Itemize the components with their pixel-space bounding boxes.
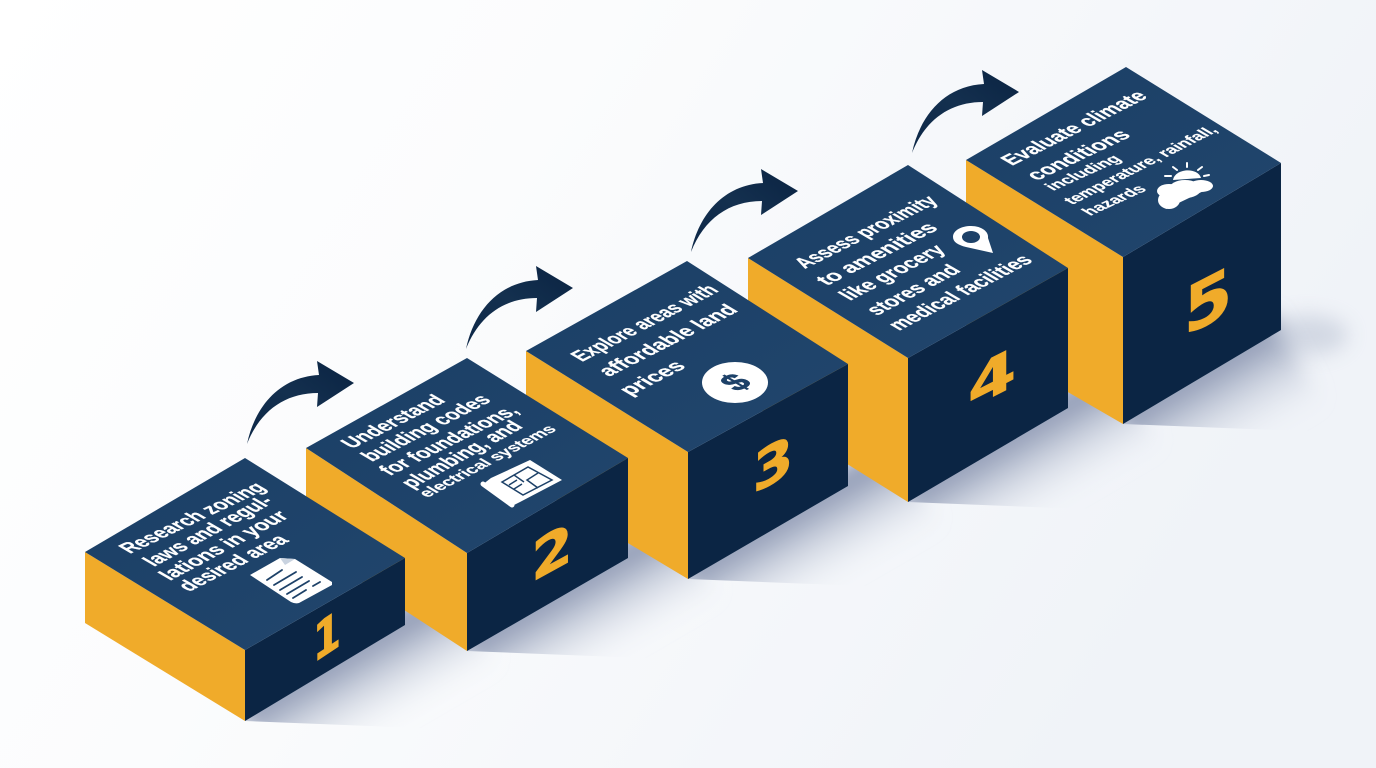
arrow: step 2 to 3 [466, 266, 573, 349]
step 5 text: conditions [1020, 126, 1136, 184]
step 2 text: plumbing, and [395, 417, 528, 492]
step 2 text: Understand [335, 391, 451, 452]
icon: document [250, 558, 332, 603]
panel: step 4 block [748, 165, 1068, 502]
number 1: 1 [313, 597, 341, 676]
step 3 text [565, 281, 743, 399]
step 2 text [335, 391, 561, 500]
icon: sun behind cloud [1165, 163, 1209, 180]
step 3 text: prices [613, 357, 691, 399]
icon: dollar coin: $ [712, 369, 761, 396]
step 1 text: Research zoning [113, 479, 271, 557]
number 4: 4 [968, 335, 1016, 422]
number 2: 2 [531, 510, 573, 596]
icon: location pin [953, 226, 993, 253]
block shadows [235, 313, 1348, 762]
step 1 text: desired area [172, 531, 295, 595]
step 5 text: temperature, rainfall, [1059, 123, 1222, 207]
step 5 text: including [1040, 152, 1126, 193]
icon: cloud [1157, 180, 1213, 209]
step 5 text: hazards [1077, 182, 1151, 218]
arrow: step 3 to 4 [691, 169, 798, 252]
number 3: 3 [753, 423, 793, 508]
arrow: step 4 to 5 [912, 70, 1019, 153]
step 1 text: laws and regul- [137, 492, 279, 570]
step 3 text: affordable land [592, 301, 743, 380]
panel: step 2 block [306, 358, 628, 651]
step 4 text: to amenities [810, 219, 943, 289]
arrow: step 1 to 2 [247, 361, 354, 444]
step 5 text [995, 87, 1222, 218]
step 3 text: Explore areas with [565, 281, 724, 365]
step 1 text [113, 479, 295, 595]
step 2 text: for foundations, [373, 402, 524, 479]
icon: dollar coin [702, 362, 768, 403]
step 2 text: building codes [355, 391, 496, 465]
step 4 text: Assess proximity [788, 192, 944, 272]
panel: step 5 block [966, 67, 1281, 424]
step 4 text [788, 192, 1038, 334]
step 4 text: medical facilities [882, 251, 1038, 334]
step 4 text: stores and [860, 261, 966, 319]
step 4 text: like grocery [833, 241, 952, 304]
step 5 text: Evaluate climate [995, 87, 1153, 169]
icon: blueprint [482, 460, 562, 506]
panel: step 1 block [85, 458, 405, 721]
panel: step 3 block [526, 261, 848, 579]
number 5: 5 [1184, 252, 1232, 352]
step 2 text: electrical systems [414, 422, 561, 500]
step 1 text: lations in your [153, 507, 295, 584]
